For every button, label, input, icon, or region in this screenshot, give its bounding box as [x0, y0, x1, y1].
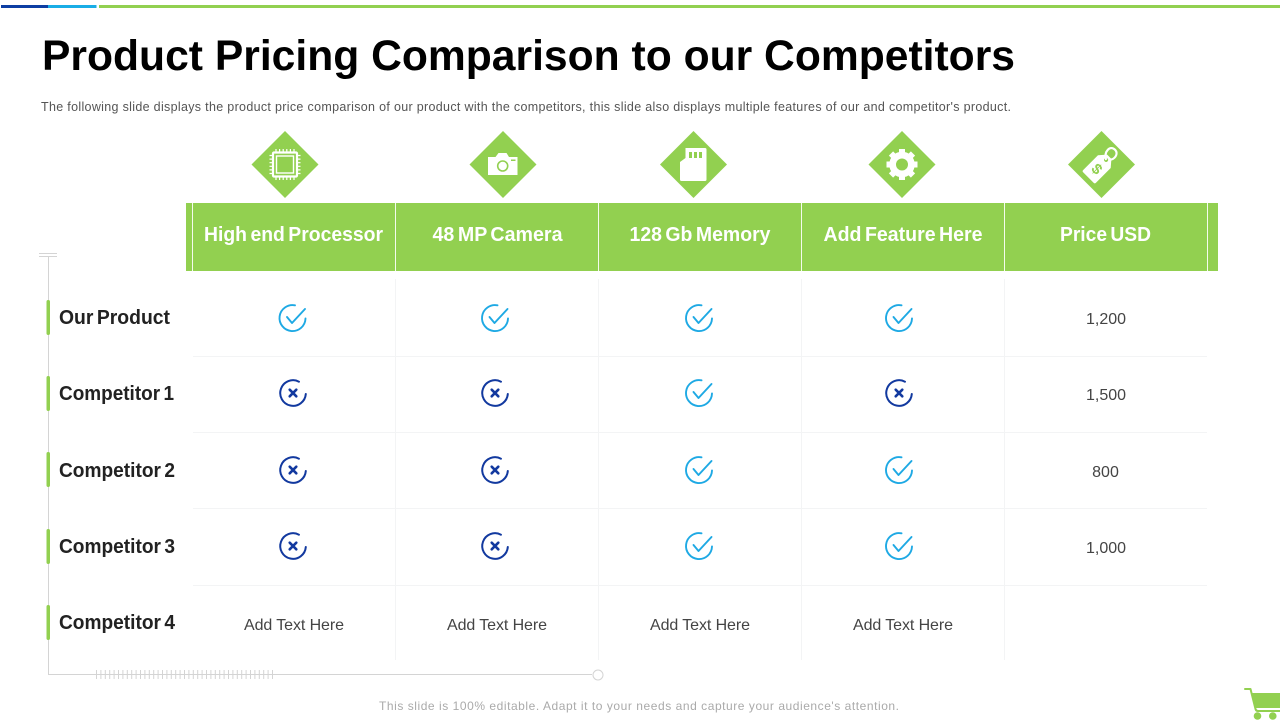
header: processor: High end Processor [204, 224, 383, 246]
icon: processor [252, 131, 318, 198]
top accent bar [1, 5, 1280, 8]
footer note: This slide is 100% editable. Adapt it to your needs and capture your audience's attention. [379, 699, 899, 713]
icon: gear [868, 131, 936, 198]
row: competitor 1: 1,500 [1086, 387, 1126, 404]
header: memory: 128 Gb Memory [630, 224, 771, 246]
row: competitor 3 [46, 529, 1126, 564]
icon: price tag: $ [1088, 160, 1106, 179]
row: competitor 4: Add Text Here [650, 617, 750, 634]
row: competitor 2: Competitor 2 [59, 460, 175, 482]
row: competitor 3: 1,000 [1086, 540, 1126, 557]
row: competitor 1 [46, 376, 1126, 411]
row: competitor 2 [46, 452, 1119, 487]
row: our product [46, 300, 1126, 335]
icon: memory card [660, 131, 727, 198]
row: competitor 4: Competitor 4 [59, 612, 176, 634]
subtitle: The following slide displays the product price comparison of our product with the competitors, this slide also displays multiple features of our and competitor's product. [41, 100, 1011, 114]
row: our product: 1,200 [1086, 311, 1126, 328]
header: add feature: Add Feature Here [824, 224, 982, 246]
row: competitor 4 [46, 605, 953, 640]
row axis frame [39, 254, 603, 680]
row: our product: Our Product [59, 307, 170, 329]
table header band [186, 203, 1218, 271]
row: competitor 2: 800 [1092, 464, 1119, 481]
header: camera: 48 MP Camera [432, 224, 563, 246]
icon: camera [470, 131, 536, 198]
row: competitor 3: Competitor 3 [59, 536, 175, 558]
title: Product Pricing Comparison to our Competitors [42, 32, 1015, 80]
header: price: Price USD [1060, 224, 1151, 246]
row: competitor 4: Add Text Here [244, 617, 344, 634]
feature icons row [252, 131, 1135, 198]
icon: shopping cart [1245, 689, 1280, 720]
row: competitor 1: Competitor 1 [59, 383, 174, 405]
row: competitor 4: Add Text Here [447, 617, 547, 634]
icon: price tag [1068, 131, 1135, 198]
row: competitor 4: Add Text Here [853, 617, 953, 634]
